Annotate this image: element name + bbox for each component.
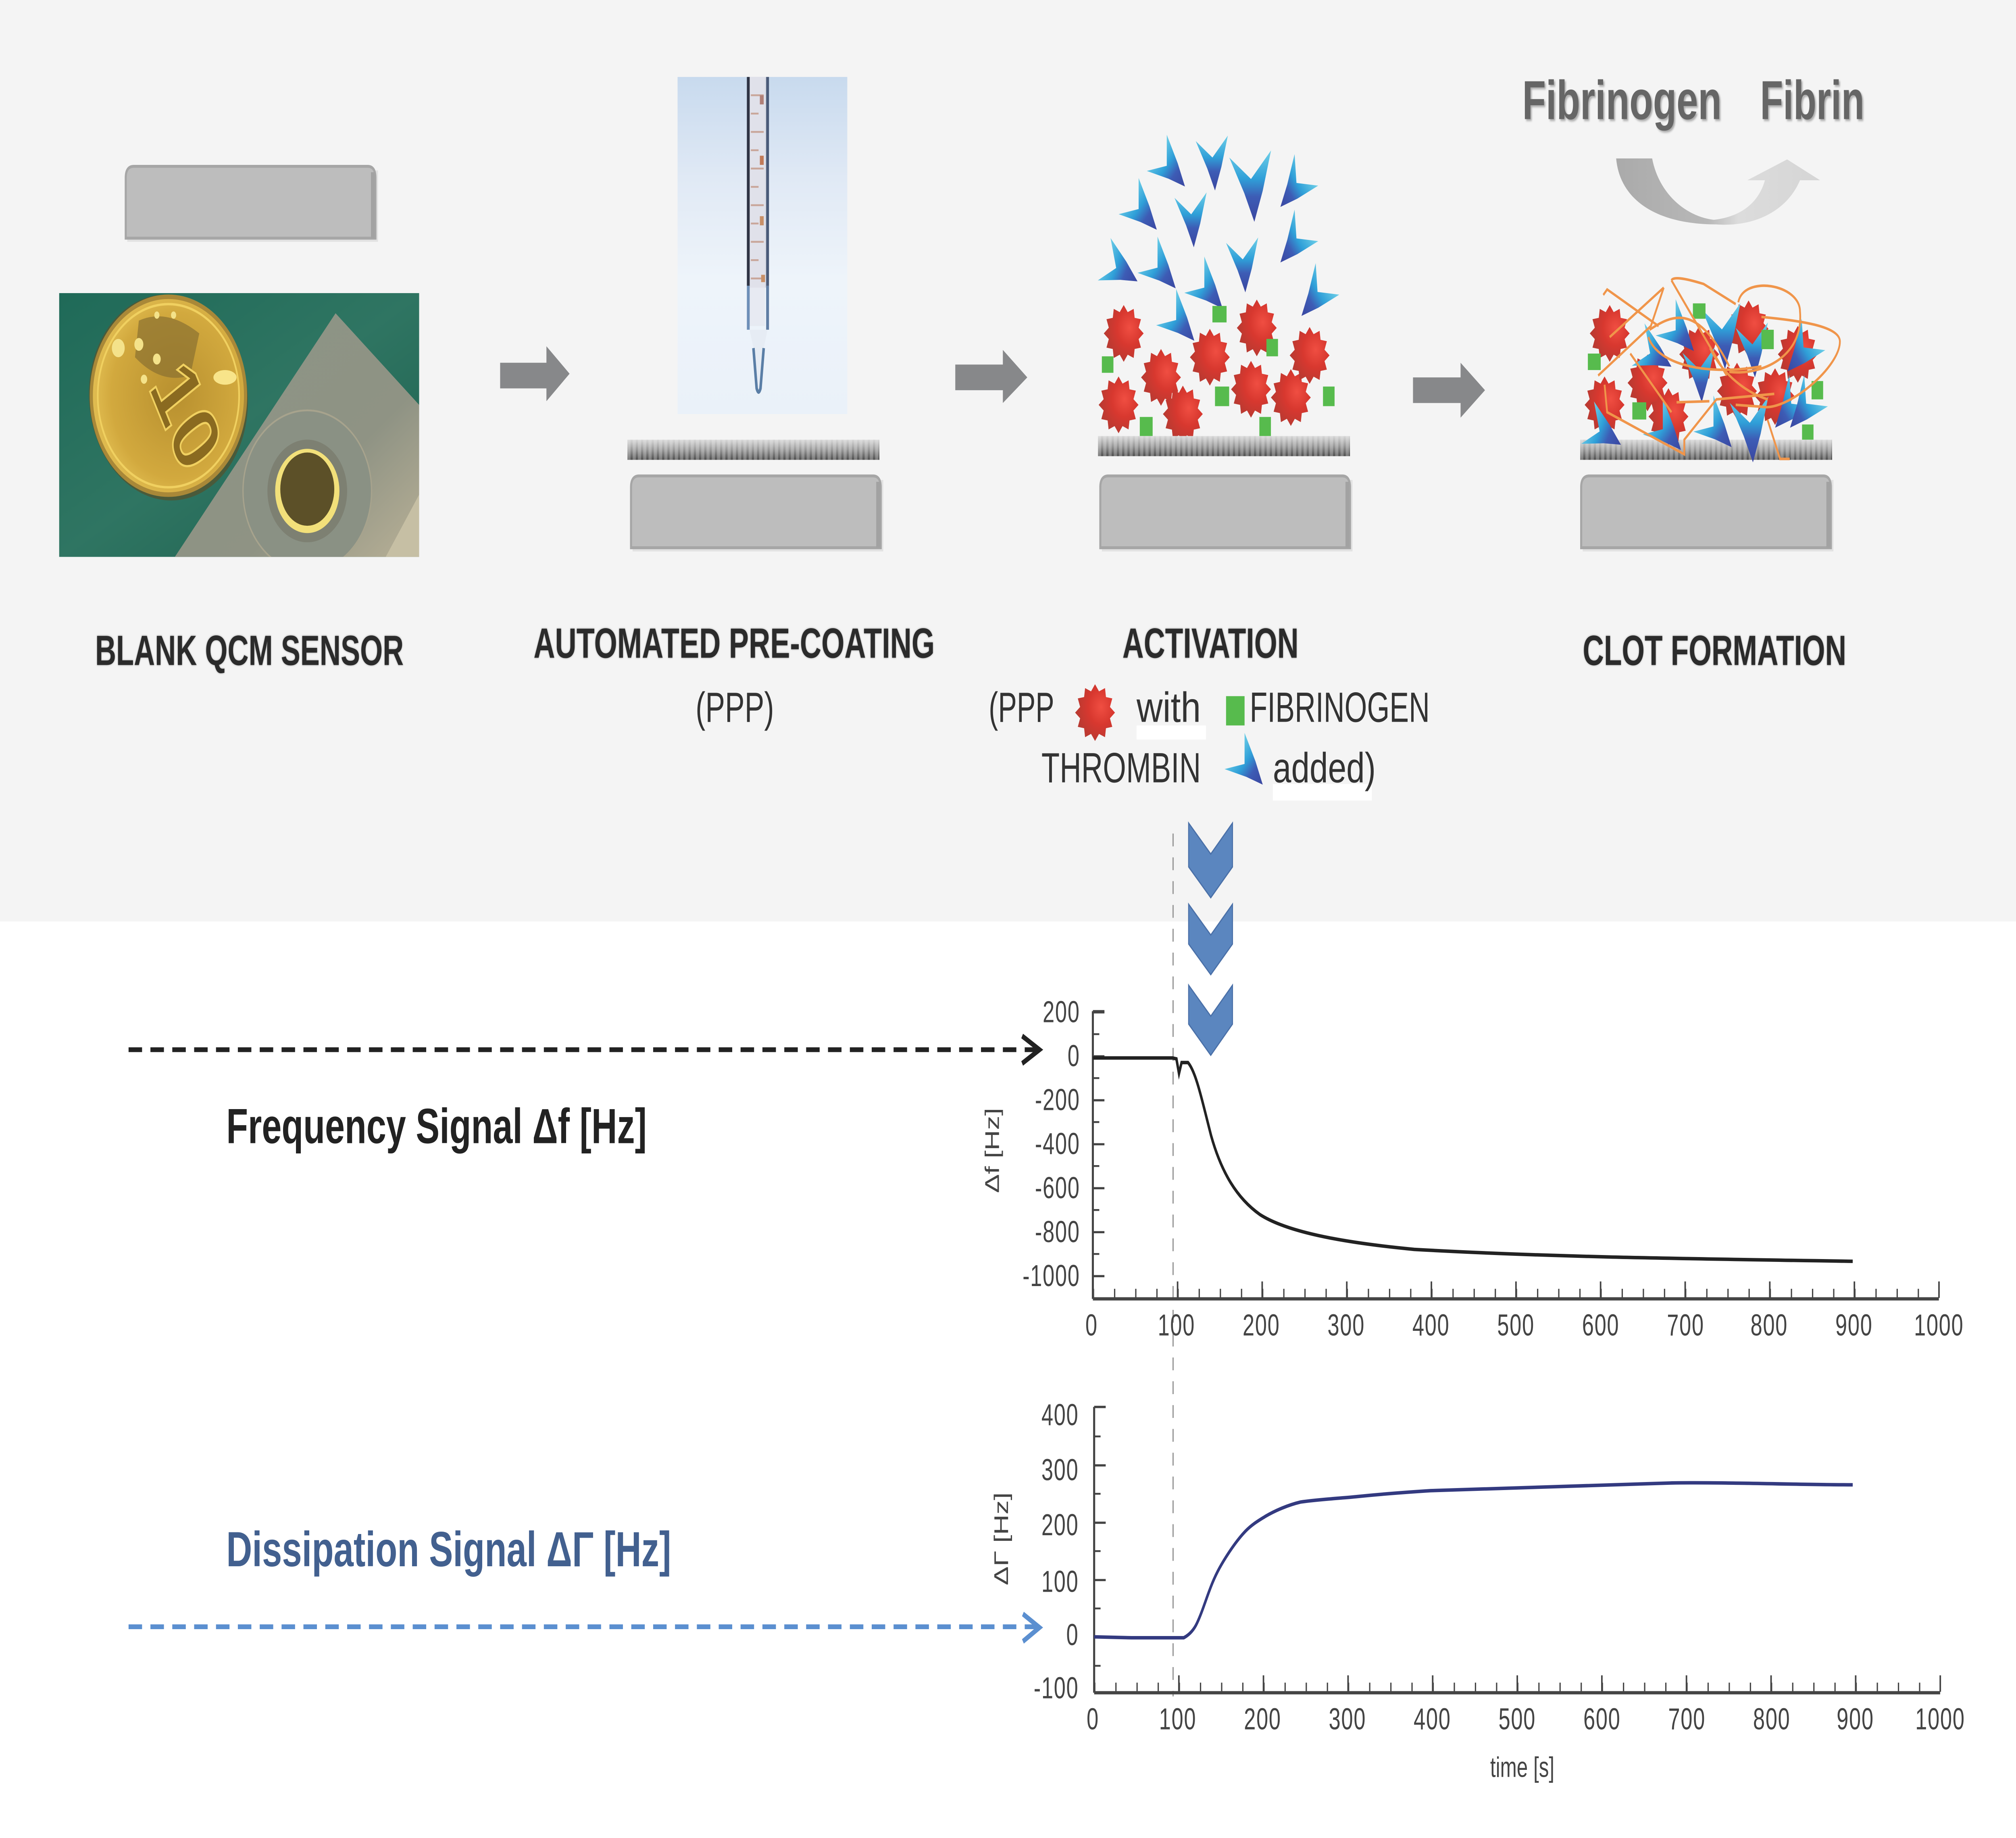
y tick labels: -600 [1035,1170,1080,1205]
x tick labels: 400 [1412,1308,1450,1342]
fibrinogen squares [1102,306,1335,436]
y tick labels: -1000 [1023,1259,1080,1293]
icon: sensor block [1100,476,1353,552]
y tick labels [1023,995,1080,1293]
step 4: clot formation [1522,69,1864,674]
icon: three downward chevrons [1189,823,1233,1055]
x tick labels: 300 [1327,1308,1365,1342]
y tick labels: -200 [1035,1082,1080,1117]
y tick labels [1034,1398,1079,1705]
y tick labels: 200 [1041,1508,1079,1542]
x tick labels: 200 [1243,1308,1280,1342]
icon: sensor block [1581,476,1833,552]
x tick labels: 600 [1582,1308,1619,1342]
label: fibrinogen to fibrin: Fibrin [1760,69,1864,131]
label: frequency signal: Frequency Signal Δf [Hz] [226,1099,647,1154]
thrombin molecules [1094,135,1339,360]
x tick labels: 0 [1085,1308,1098,1342]
icon: sensor block [126,167,378,242]
icon: pre-coat layer [1580,440,1832,460]
icon: sensor block [631,476,883,552]
y tick labels: -100 [1034,1671,1079,1705]
arrow: step 3 to 4 [1413,363,1485,418]
legend: reagents added: THROMBIN [1041,745,1201,791]
icon: pre-coat layer [627,440,879,460]
x tick labels: 500 [1497,1308,1535,1342]
chart: dissipation signal [990,1398,1965,1783]
y tick labels: 0 [1066,1617,1079,1652]
dissipation curve [1094,1483,1853,1638]
x tick labels [1087,1702,1965,1736]
y axis and ticks [1093,1407,1941,1693]
y axis and ticks [1092,1011,1940,1299]
arrow: frequency signal pointer [129,1036,1039,1064]
photo: coin and QCM sensor [59,277,419,572]
clot particles [1585,300,1818,445]
y tick labels: 0 [1068,1039,1080,1073]
step 3: activation [989,135,1430,804]
chart: frequency signal [981,995,1964,1342]
label: PPP: (PPP) [696,684,774,731]
y tick labels: 300 [1041,1453,1079,1487]
label: dissipation signal: Dissipation Signal ΔΓ [Hz] [226,1522,671,1577]
arrow: dissipation signal pointer [129,1614,1039,1641]
x tick labels: 1000 [1914,1308,1964,1342]
x tick labels: 100 [1159,1702,1196,1736]
x tick labels: 200 [1244,1702,1281,1736]
photo: coin and QCM sensor: 10 [135,343,237,489]
fibrin network [1598,278,1840,459]
x tick labels: 900 [1837,1702,1874,1736]
icon: pre-coat layer [1098,436,1350,456]
x tick labels: 400 [1414,1702,1451,1736]
step 1: blank QCM sensor [59,167,419,674]
x tick labels: 800 [1753,1702,1790,1736]
y tick labels: 400 [1041,1398,1079,1432]
legend: reagents added: FIBRINOGEN [1250,684,1430,731]
x tick labels: 700 [1668,1702,1706,1736]
x tick labels [1085,1308,1964,1342]
arrow: step 1 to 2 [500,346,570,401]
x tick labels: 600 [1583,1702,1620,1736]
x tick labels: 100 [1158,1308,1195,1342]
PPP particles [1099,300,1330,442]
label: clot formation: CLOT FORMATION [1583,627,1846,674]
x tick labels: 800 [1750,1308,1788,1342]
photo: pipette [677,77,847,414]
label: fibrinogen to fibrin [1522,69,1864,131]
legend: reagents added: (PPP [989,684,1054,731]
x tick labels: 1000 [1915,1702,1965,1736]
x tick labels: 300 [1329,1702,1366,1736]
y axis title: Δf [Hz] [981,1108,1003,1193]
step 2: automated pre-coating [533,77,935,731]
y tick labels: 100 [1041,1564,1079,1599]
label: blank QCM sensor: BLANK QCM SENSOR [95,627,404,674]
x tick labels: 900 [1835,1308,1872,1342]
panel: experimental workflow background [0,0,2016,922]
label: fibrinogen to fibrin: Fibrinogen [1522,69,1722,131]
arrow: step 2 to 3 [955,350,1027,403]
x tick labels: 700 [1667,1308,1704,1342]
y tick labels: -800 [1035,1215,1080,1249]
y axis title: ΔΓ [Hz] [990,1492,1012,1585]
clot thrombin [1578,299,1828,469]
y tick labels: -400 [1035,1126,1080,1161]
x axis title: time [s] [1490,1751,1554,1783]
arrow: fibrinogen to fibrin conversion [1616,158,1820,225]
legend: reagents added: added) [1273,745,1376,791]
clot fibrinogen squares [1588,303,1823,440]
x tick labels: 500 [1498,1702,1536,1736]
label: activation: ACTIVATION [1123,620,1299,667]
legend: reagents added [989,684,1430,804]
x tick labels: 0 [1087,1702,1099,1736]
label: automated pre-coating: AUTOMATED PRE-COATING [533,620,935,667]
legend: reagents added: with [1136,684,1201,731]
y tick labels: 200 [1043,995,1080,1029]
frequency curve [1093,1058,1853,1261]
